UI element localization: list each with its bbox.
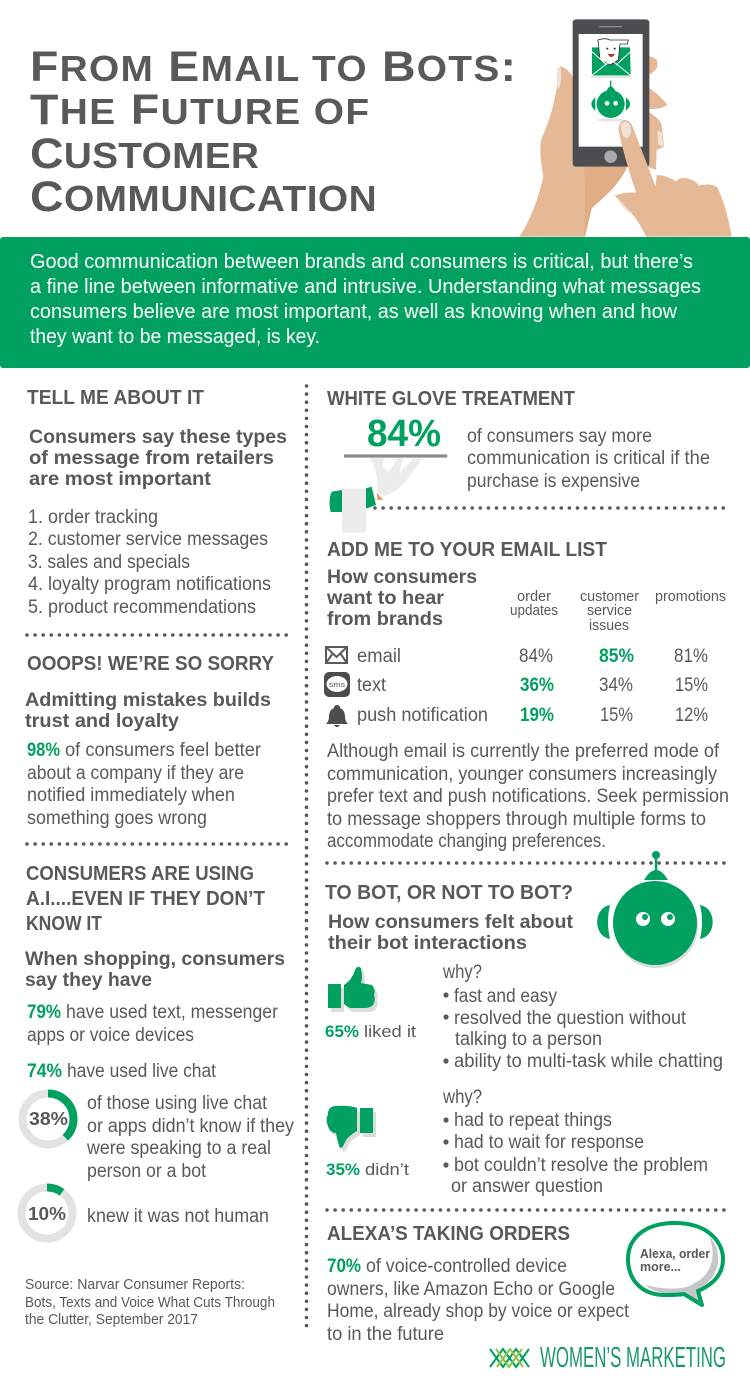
text: didn't know: person or a bot [87, 1161, 207, 1182]
panel: alexa's taking orders [327, 1223, 723, 1345]
intro text: they want to be messaged, is key. [30, 325, 320, 348]
ranked list: 5. product recommendations [28, 597, 256, 618]
stat: 79%: 79% [27, 1002, 61, 1023]
stat description: of consumers say more [467, 426, 652, 447]
stat text [27, 740, 262, 829]
panel: tell me about it [27, 387, 287, 618]
reasons: liked: why? [442, 962, 482, 983]
donut: 38%: 38% [29, 1109, 68, 1129]
source note: Bots, Texts and Voice What Cuts Through [25, 1295, 275, 1311]
table headers: updates [510, 602, 558, 619]
stat: didn't [326, 1160, 409, 1179]
stat: 79% [27, 1002, 279, 1046]
subheading: When shopping, consumers [25, 948, 285, 970]
icon: thumbs up [328, 967, 378, 1012]
subheading [29, 426, 287, 490]
heading: A.I....EVEN IF THEY DON’T [26, 888, 265, 910]
subheading: are most important [29, 468, 212, 490]
subheading: their bot interactions [328, 932, 527, 954]
heading: WHITE GLOVE TREATMENT [327, 388, 575, 410]
intro text: Good communication between brands and consumers is critical, but there’s [30, 250, 693, 273]
title: COMMUNICATION [30, 173, 377, 221]
reasons: didn't like: or answer question [451, 1176, 603, 1197]
subheading: from brands [327, 608, 443, 630]
donut: 10%: 10% [28, 1204, 66, 1224]
big stat: 84% [367, 413, 441, 455]
icon: thumbs down [326, 1106, 376, 1152]
stat description [467, 426, 710, 492]
icon: palm shadow [566, 167, 627, 237]
reasons: liked: resolved the question without [454, 1008, 687, 1029]
body text [327, 1256, 630, 1345]
stat: didn't: 35% [326, 1160, 360, 1179]
subheading: trust and loyalty [25, 710, 179, 732]
reasons: didn't like [442, 1087, 708, 1197]
icon: bell [326, 705, 348, 727]
subheading: say they have [25, 969, 152, 991]
callout: speech bubble [628, 1223, 723, 1305]
paragraph: accommodate changing preferences. [327, 831, 606, 852]
stat text: of consumers feel better [65, 740, 262, 761]
icon: phone [573, 19, 649, 167]
paragraph: communication, younger consumers increasingly [327, 764, 717, 785]
table row: push notification: push notification [357, 705, 488, 726]
heading: TO BOT, OR NOT TO BOT? [325, 882, 573, 904]
stat: liked it [325, 1022, 416, 1041]
text: didn't know: of those using live chat [87, 1093, 268, 1114]
source note: Source: Narvar Consumer Reports: [25, 1277, 245, 1293]
body text: 70% [327, 1256, 361, 1277]
title [30, 43, 516, 221]
stat text: notified immediately when [27, 785, 235, 806]
donut: 38% [22, 1094, 74, 1144]
table row: push notification: 15% [600, 705, 633, 726]
paragraph: to message shoppers through multiple forms to [327, 809, 706, 830]
text: didn't know: were speaking to a real [86, 1138, 271, 1159]
table row: email: 81% [674, 646, 708, 667]
subheading: want to hear [326, 587, 444, 609]
subheading [328, 911, 574, 954]
stat: 79%: have used text, messenger [66, 1002, 279, 1023]
icon: sms: sms [329, 680, 345, 689]
subheading: How consumers [327, 566, 477, 588]
ranked list: 2. customer service messages [28, 529, 268, 550]
icon: envelope [326, 647, 347, 663]
reasons: didn't like: bot couldn’t resolve the problem [454, 1155, 708, 1176]
callout: speech bubble: more... [640, 1260, 681, 1274]
heading: ADD ME TO YOUR EMAIL LIST [327, 539, 607, 561]
title: FROM EMAIL TO BOTS: [30, 43, 516, 91]
icon: gloved hand with tray [330, 454, 447, 533]
icon: pointing hand [615, 120, 732, 237]
illustration: hands holding phone [519, 19, 732, 237]
icon: far-side fingers [647, 56, 667, 170]
stat text: about a company if they are [27, 763, 244, 784]
heading: ALEXA’S TAKING ORDERS [327, 1223, 570, 1245]
table row: text: 34% [599, 675, 633, 696]
intro text [30, 250, 701, 348]
stat text: something goes wrong [27, 808, 207, 829]
title: THE FUTURE OF [30, 86, 369, 134]
ranked list [28, 507, 271, 618]
icon: left hand [519, 66, 585, 237]
icon: email character [591, 39, 631, 78]
table row: push notification: 12% [675, 705, 708, 726]
table headers: issues [589, 617, 629, 634]
body text: Home, already shop by voice or expect [327, 1301, 630, 1322]
donut: 10% [22, 1188, 72, 1238]
callout: speech bubble: Alexa, order [640, 1247, 710, 1261]
icon: sms [324, 672, 350, 697]
paragraph: Although email is currently the preferred mode of [327, 741, 720, 762]
panel: white glove treatment [327, 388, 710, 533]
subheading: of message from retailers [29, 447, 274, 469]
heading [26, 863, 265, 935]
intro text: a fine line between informative and intrusive. Understanding what messages [30, 275, 701, 298]
source note [25, 1277, 275, 1328]
stat description: communication is critical if the [467, 448, 710, 469]
subheading: How consumers felt about [328, 911, 574, 933]
table row: text [324, 672, 708, 697]
subheading: Consumers say these types [29, 426, 287, 448]
reasons: liked [442, 962, 723, 1072]
table row: email [326, 646, 708, 667]
table row: push notification: 19% [520, 705, 554, 726]
stat text: 98% [27, 740, 60, 761]
heading: KNOW IT [26, 913, 102, 935]
heading: CONSUMERS ARE USING [26, 863, 254, 885]
text: knew not human: knew it was not human [87, 1206, 269, 1227]
stat: liked it: liked it [364, 1022, 416, 1041]
table headers: order [517, 588, 551, 605]
stat: 74%: have used live chat [67, 1061, 217, 1082]
heading: OOOPS! WE’RE SO SORRY [27, 653, 275, 675]
table row: email: 85% [599, 646, 634, 667]
icon: small robot [591, 81, 630, 122]
icon: robot [597, 851, 713, 968]
subheading: Admitting mistakes builds [25, 689, 271, 711]
body text: to in the future [327, 1324, 444, 1345]
panel: consumers using A.I. [22, 863, 294, 1238]
table headers: promotions [655, 588, 726, 605]
text: didn't know: or apps didn’t know if they [87, 1116, 294, 1137]
ranked list: 4. loyalty program notifications [28, 574, 271, 595]
stat: liked it: 65% [325, 1022, 359, 1041]
source note: the Clutter, September 2017 [25, 1312, 198, 1328]
text: didn't know [86, 1093, 294, 1182]
table row: push notification [326, 705, 708, 727]
subheading [25, 948, 285, 991]
panel: add me to your email list [324, 539, 729, 852]
panel: green intro band [0, 237, 750, 368]
intro text: consumers believe are most important, as well as knowing when and how [30, 300, 677, 323]
body text: of voice-controlled device [366, 1256, 567, 1277]
reasons: liked: fast and easy [454, 986, 557, 1007]
table row: email: email [357, 646, 401, 667]
reasons: didn't like: had to wait for response [454, 1132, 644, 1153]
ranked list: 3. sales and specials [28, 552, 190, 573]
subheading [326, 566, 477, 630]
table row: text: 15% [675, 675, 708, 696]
stat: 79%: apps or voice devices [27, 1025, 194, 1046]
stat: 74%: 74% [27, 1061, 62, 1082]
table row: text: text [357, 675, 387, 696]
panel: to bot or not to bot [325, 851, 723, 1197]
body text: owners, like Amazon Echo or Google [327, 1279, 615, 1300]
paragraph [327, 741, 729, 852]
panel: ooops [25, 653, 275, 829]
table headers: customer [580, 588, 639, 605]
table headers [510, 588, 726, 634]
stat description: purchase is expensive [467, 471, 640, 492]
table row: text: 36% [520, 675, 554, 696]
reasons: didn't like: had to repeat things [454, 1110, 612, 1131]
title: CUSTOMER [30, 130, 259, 178]
stat: didn't: didn’t [365, 1160, 409, 1179]
ranked list: 1. order tracking [28, 507, 158, 528]
table row: email: 84% [519, 646, 553, 667]
reasons: didn't like: why? [442, 1087, 482, 1108]
subheading [25, 689, 271, 732]
heading: TELL ME ABOUT IT [27, 387, 204, 409]
table headers: service [587, 602, 632, 619]
paragraph: prefer text and push notifications. Seek permission [327, 786, 729, 807]
reasons: liked: talking to a person [455, 1029, 602, 1050]
reasons: liked: ability to multi-task while chatting [454, 1051, 723, 1072]
